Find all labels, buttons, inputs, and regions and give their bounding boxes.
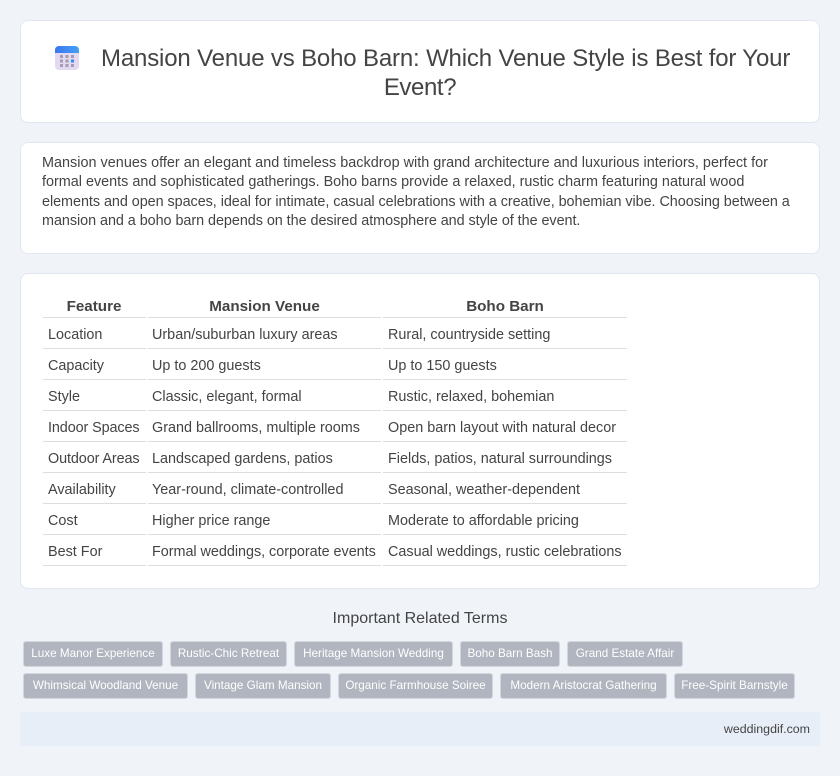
tag group: related terms <box>23 641 795 699</box>
table: comparison: Landscaped gardens, patios <box>152 451 333 467</box>
table: comparison: Cost <box>48 513 78 529</box>
table: comparison: Availability <box>48 482 116 498</box>
table: comparison: Up to 150 guests <box>388 358 497 374</box>
table: comparison: Moderate to affordable pricing <box>388 513 579 529</box>
table: comparison: Best For <box>48 544 102 560</box>
title <box>101 45 790 101</box>
table: comparison: Outdoor Areas <box>48 451 140 467</box>
panel: comparison table <box>20 273 820 589</box>
table: comparison: Formal weddings, corporate events <box>152 544 376 560</box>
tag group: related terms: Organic Farmhouse Soiree <box>345 679 486 692</box>
tag group: related terms: Rustic-Chic Retreat <box>178 647 279 660</box>
text block: introduction: Mansion venues offer an elegant and timeless backdrop with grand architecture and luxurious interiors, perfect for <box>42 155 768 171</box>
table: comparison: Rustic, relaxed, bohemian <box>388 389 554 405</box>
footer bar <box>20 712 820 746</box>
table: comparison: Capacity <box>48 358 104 374</box>
column heading: Feature: Feature <box>67 298 121 315</box>
tag group: related terms: Modern Aristocrat Gathering <box>510 679 657 692</box>
table: comparison <box>43 298 627 566</box>
tag group: related terms: Heritage Mansion Wedding <box>303 647 444 660</box>
table: comparison: Seasonal, weather-dependent <box>388 482 580 498</box>
tag group: related terms: Luxe Manor Experience <box>31 647 155 660</box>
text block: introduction: elements and open spaces, ideal for intimate, casual celebrations with a creative, bohemian vibe. Choosing between a <box>42 194 790 210</box>
column heading: Mansion Venue: Mansion Venue <box>209 298 320 315</box>
heading: Important Related Terms: Important Related Terms <box>333 610 507 627</box>
table: comparison: Style <box>48 389 80 405</box>
title: Event? <box>384 74 456 101</box>
table: comparison: Casual weddings, rustic celebrations <box>388 544 622 560</box>
tag group: related terms: Whimsical Woodland Venue <box>33 679 178 692</box>
table: comparison: Location <box>48 327 102 343</box>
column heading: Boho Barn: Boho Barn <box>466 298 544 315</box>
panel: introduction <box>20 142 820 254</box>
table: comparison: Higher price range <box>152 513 270 529</box>
table: comparison: Grand ballrooms, multiple rooms <box>152 420 360 436</box>
text block: introduction: formal events and sophisticated gatherings. Boho barns provide a relaxed, rustic charm featuring natural wood <box>42 174 744 190</box>
table: comparison: Classic, elegant, formal <box>152 389 302 405</box>
title: Mansion Venue vs Boho Barn: Which Venue Style is Best for Your <box>101 45 790 72</box>
table: comparison: Indoor Spaces <box>48 420 140 436</box>
table: comparison: Rural, countryside setting <box>388 327 550 343</box>
icon: calendar <box>55 46 79 70</box>
table: comparison: Up to 200 guests <box>152 358 261 374</box>
footer text: site name: weddingdif.com <box>724 722 810 736</box>
tag group: related terms: Free-Spirit Barnstyle <box>681 679 788 692</box>
table: comparison: Fields, patios, natural surroundings <box>388 451 612 467</box>
tag group: related terms: Grand Estate Affair <box>576 647 674 660</box>
table: comparison: Open barn layout with natural decor <box>388 420 616 436</box>
table: comparison: Urban/suburban luxury areas <box>152 327 338 343</box>
tag group: related terms: Boho Barn Bash <box>467 647 553 660</box>
text block: introduction: mansion and a boho barn depends on the desired atmosphere and style of the event. <box>42 213 580 229</box>
table: comparison: Year-round, climate-controlled <box>152 482 343 498</box>
tag group: related terms: Vintage Glam Mansion <box>204 679 322 692</box>
panel: header <box>20 20 820 123</box>
text block: introduction <box>42 155 790 229</box>
